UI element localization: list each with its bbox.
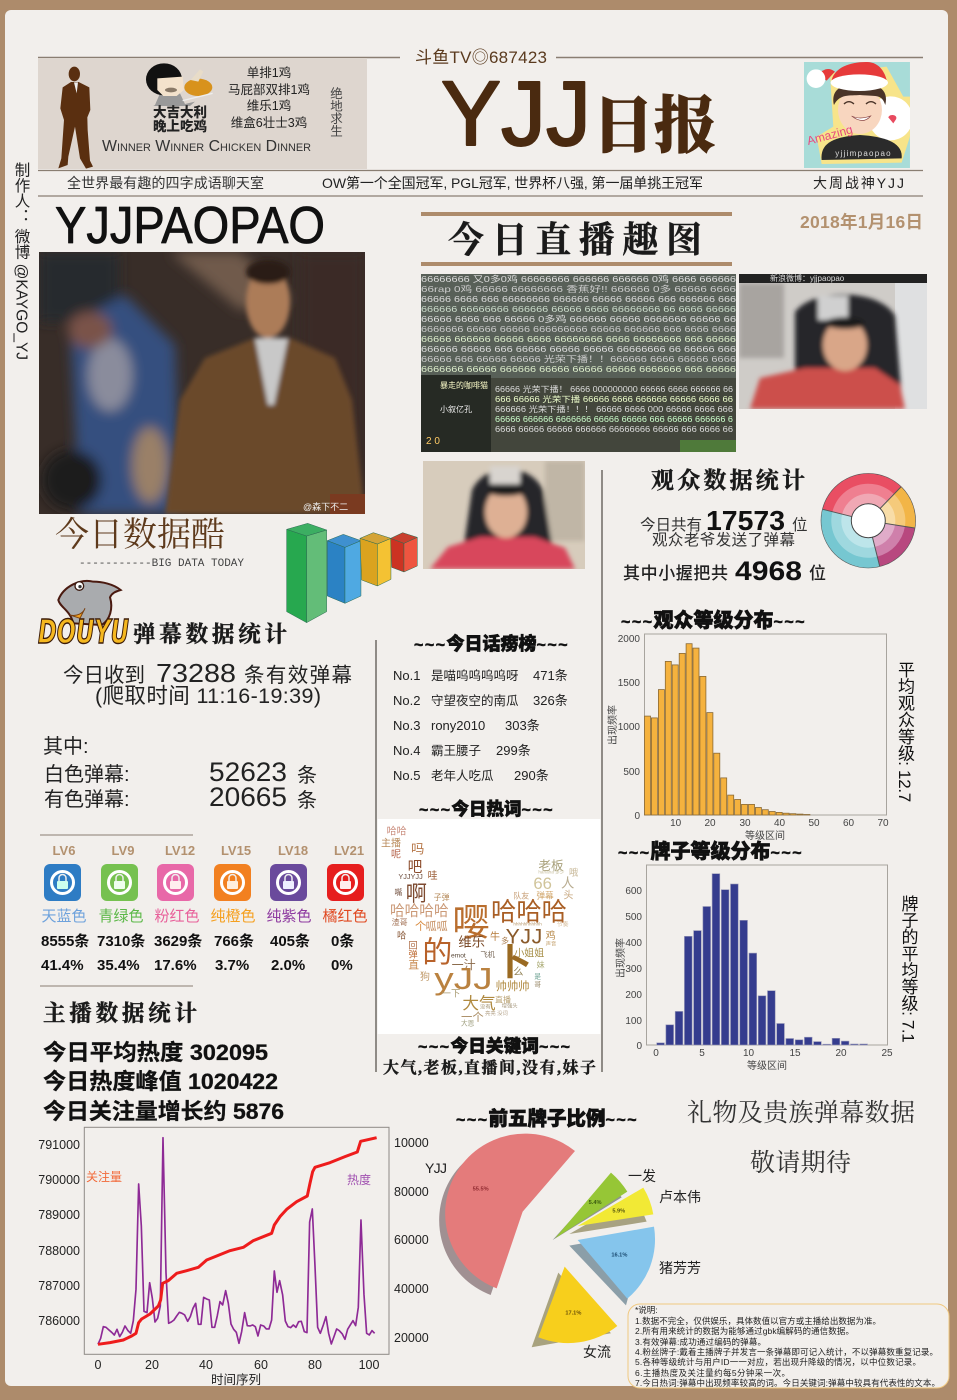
colour names: 粉红色 [154,908,200,925]
colour names: 天蓝色 [41,908,87,925]
text block: white vs colored danmaku: 有色弹幕: [44,788,130,811]
line chart: followers and heat: 786000 [38,1314,80,1328]
gifts placeholder: 礼物及贵族弹幕数据 [687,1099,915,1127]
photo: streamer smiling in chair [423,461,585,569]
tagline: chat room: 全世界最有趣的四字成语聊天室 [67,175,264,191]
bar chart: viewer level: 40 [774,818,785,829]
photo: chat screenshot: 小叙亿孔 [440,404,472,414]
bar chart: viewer level: 2000 [618,634,640,645]
word cloud: YJJYJJ [398,872,423,881]
title: YJJ日报 [441,63,716,165]
word cloud: YJJ [506,924,542,948]
text block: streamer stats: 今日平均热度 302095 [43,1040,268,1065]
word cloud: 增强头 [502,1002,518,1010]
word cloud: 是 [534,972,541,980]
line chart: followers and heat: 40000 [394,1282,429,1296]
panel: audience stats: 位 [792,516,808,534]
photo: chat screenshot [421,274,736,452]
notes box: 6.主播热度及关注量约每5分钟采一次。 [635,1368,790,1378]
list: top talkers: No.1 [393,668,420,683]
total viewers: 今日共有 [640,516,702,534]
bar chart: badge level: 10 [743,1048,754,1059]
icon: meme face with roast chicken [146,63,213,106]
word cloud: hahaha 多少 [538,868,565,875]
heading: 观众数据统计 [651,468,805,493]
list: top talkers: 霸王腰子 [431,744,481,758]
percentages: 41.4% [41,957,84,974]
win list: 维盒6壮士3鸡 [231,115,307,130]
panel: audience stats: 位 [809,563,826,583]
icon: man silhouette [58,67,93,169]
heading: today's keywords: ~~~今日关键词~~~ [418,1035,572,1056]
bar chart: badge level: 600 [625,886,642,897]
bar chart: badge level: 0 [653,1048,659,1059]
pie chart: top five badges: 16.1% [611,1253,627,1259]
photo: streamer in gaming chair, with weibo strip: 新浪微博：yjjpaopao [770,273,845,283]
word cloud: 嘴 [394,887,402,897]
heading: big data today: 今日数据酷 [55,516,225,554]
heading: viewer level distribution: ~~~观众等级分布~~~ [621,608,806,632]
keywords: 大气,老板,直播间,没有,妹子 [383,1058,596,1077]
bar chart: viewer level: 1500 [618,678,640,689]
bar chart: viewer level: 0 [634,811,640,822]
line chart: followers and heat: 10000 [394,1136,429,1150]
bar chart: viewer level: 10 [670,818,682,829]
photo: chat screenshot: 6666666 66666 666666 66666 66666 66666 6666666 666 66666 [421,364,736,374]
heat line [98,1138,375,1344]
pie chart: top five badges: 卢本伟 [659,1189,701,1205]
photo: chat screenshot: 666666 光荣下播！！！ 66666 6666 000 66666 6666 666 [495,404,734,414]
percentages: 17.6% [154,957,197,974]
sentence: 观众老爷发送了弹幕 [652,531,795,549]
word cloud: 亮亮 没词 [485,1009,508,1017]
photo: chat screenshot: 66666 6666 666 66666666 666666 66666 66666 666 666666 666 [421,294,736,304]
bar chart: viewer level: 50 [808,818,820,829]
text block: streamer stats: 今日热度峰值 1020422 [43,1069,278,1094]
text block: total danmaku: (爬取时间 11:16-19:39) [95,684,321,708]
notes box: 2.所有用来统计的数据为能够通过gbk编解码的通信数据。 [635,1326,854,1336]
text block: white vs colored danmaku: 条 [297,789,317,812]
word cloud: 子弹 [434,892,450,902]
text block: white vs colored danmaku: 条 [297,764,317,787]
line chart: followers and heat: 20 [145,1358,159,1372]
line chart: followers and heat: 788000 [38,1244,80,1258]
pie chart: top five badges: 一发 [628,1168,656,1184]
list: top talkers: rony2010 [431,718,485,733]
pie chart: top five badges: 5.9% [612,1209,625,1215]
heading: top five badges: ~~~前五牌子比例~~~ [456,1107,638,1130]
notes box [628,1304,949,1388]
gifts placeholder [687,1099,915,1177]
list: top talkers: 326条 [533,693,568,708]
counts [41,933,354,950]
icon: blue lock [44,864,81,901]
word cloud: 回 [408,940,418,950]
percentages: 3.7% [215,957,249,974]
word cloud: 牛 [490,930,500,943]
word cloud: 头 [563,889,573,901]
level labels [53,843,364,858]
panel: audience stats: 4968 [735,556,802,586]
icon: red lock [327,864,364,901]
win list: 维乐1鸡 [247,98,291,113]
bar chart: badge level: 5 [699,1048,705,1059]
icon: green lock [101,864,138,901]
pie chart: top five badges: 55.5% [473,1187,489,1193]
line chart: followers and heat: 20000 [394,1331,429,1345]
word cloud: 嘤 [452,902,490,944]
word cloud: 帅帅帅 [496,980,530,993]
heading: streamer stats: 主播数据统计 [43,1001,197,1026]
heading: danmaku stats: 弹幕数据统计 [133,622,287,647]
word cloud: 呢 [391,849,401,861]
doughnut chart [821,473,916,568]
word cloud: 弹幕 [536,889,554,900]
bar chart: badge level: 15 [789,1048,801,1059]
photo: streamer in suit [39,252,365,514]
heading: today's fun screenshots [421,212,732,266]
icon: cartoon avatar: yjjimpaopao [835,149,891,158]
icon: Douyu shark logo: DOUYU [38,612,129,651]
icon: 3D bar chart [287,523,417,623]
icon: cartoon avatar: Amazing [805,122,854,148]
heading: today's fun screenshots: 今日直播趣图 [448,220,702,260]
word cloud: yJJ [434,962,493,996]
line chart: followers and heat: 80 [308,1358,322,1372]
list: top talkers: No.3 [393,718,420,733]
bar chart: badge level: 出现频率 [614,938,627,978]
date: 2018年1月16日 [800,212,923,232]
word cloud: hhhhhhhhhhh [513,922,542,927]
list: top talkers: 303条 [505,718,540,733]
photo: chat screenshot: 6666 66666 66666 666666 66666666 66666 666 6666 66 [495,425,734,434]
colour names [41,908,368,925]
streamer name: YJJPAOPAO [55,197,325,255]
line chart: followers and heat: 60000 [394,1233,429,1247]
word cloud: 哦 [569,867,579,878]
english slogan: Winner Winner Chicken Dinner [102,138,311,155]
percentages: 35.4% [97,957,140,974]
bar chart: viewer level: 1000 [618,722,640,733]
word cloud: 哈哈哈哈 [390,903,449,920]
list: top talkers: No.4 [393,743,420,758]
word cloud: emot [451,953,466,960]
level labels: LV21 [334,843,364,858]
notes box: 1.数据不完全，仅供娱乐，具体数值以官方或主播给出数据为准。 [635,1316,881,1326]
heading: hot words: ~~~今日热词~~~ [419,799,554,819]
text block: total danmaku [63,660,352,708]
word cloud: 主播 [381,837,401,850]
text block: streamer stats: 今日关注量增长约 5876 [43,1099,284,1124]
colour names: 青绿色 [98,908,144,925]
list: top talkers: 299条 [496,743,531,758]
heading: top talkers: ~~~今日话痨榜~~~ [414,633,569,654]
line chart: followers and heat: 0 [95,1358,102,1372]
photo: chat screenshot: 66666 666666 6666666 66666 66666 666 66666 666666 6 [495,415,734,424]
word cloud: 声音 [546,940,557,948]
word cloud: 直播 [495,994,511,1004]
pie chart: top five badges [425,1134,701,1360]
text block: total danmaku: 今日收到 [63,664,145,687]
word cloud: 队友 [513,890,529,900]
word cloud: 鸡 [546,929,556,942]
bar chart: viewer level [606,634,889,842]
icon: Douyu shark logo [38,581,129,651]
panel: audience stats: 17573 [706,505,785,536]
gifts placeholder: 敬请期待 [750,1149,851,1177]
word cloud: 一汁 [452,958,476,972]
heading: big data today: -----------BIG DATA TODAY [79,558,244,570]
word cloud [378,819,600,1034]
word cloud: 渣哥 [392,917,408,927]
photo: chat screenshot: 666 66666 光荣下播 66666 6666 666666 66666 6666 66 [495,394,734,404]
average badge level: 牌子的平均等级: 7.1 [898,895,918,1042]
vertical credit: 制作人： 微博 @KAYGO_YJ [12,162,30,360]
list: top talkers [393,668,568,783]
photo: streamer in suit: @森下不二 [303,501,348,512]
word cloud: 啊 [406,882,427,906]
word cloud: 哇 [428,869,438,882]
word cloud: 老板 [538,859,564,873]
channel number: 斗鱼TV◎687423 [415,48,547,67]
bar chart: viewer level: 等级区间 [745,829,785,842]
word cloud: 一个 [461,1011,484,1024]
line chart: followers and heat: 时间序列 [211,1372,261,1387]
bar chart: badge level: 500 [625,912,642,923]
line chart: followers and heat: 787000 [38,1279,80,1293]
colour names: 纯紫色 [266,908,312,925]
text block: white vs colored danmaku: 白色弹幕: [44,763,130,786]
photo: chat screenshot: 66666666 又0多0鸡 66666666 666666 666666 0鸡 6666 666666 [421,274,736,284]
line chart: followers and heat: 关注量 [86,1169,122,1184]
word cloud: 狗 [420,970,430,983]
photo: chat screenshot: 666666 66666 666 66666 66666 66666 66666666 66 66666 666 [421,344,736,354]
bar chart: viewer level: 20 [704,818,716,829]
photo: streamer in gaming chair, with weibo strip [739,273,927,409]
icon: orange lock [214,864,251,901]
bar chart: badge level: 20 [835,1048,847,1059]
line chart: followers and heat: 791000 [38,1138,80,1152]
panel: winner winner chicken dinner [38,58,367,169]
word cloud: 人 [561,876,574,891]
text block: total danmaku: 73288 [156,660,236,688]
level labels: LV12 [165,843,195,858]
photo: chat screenshot: 暴走的咖啡猫 [440,380,488,390]
list: top talkers: 290条 [514,768,549,783]
photo: chat screenshot: 66rap 0鸡 66666 66666666 香蕉好!! 666666 0多 66666 6666 [421,284,736,294]
line chart: followers and heat: 100 [359,1358,379,1372]
line chart: followers and heat: 热度 [347,1172,371,1187]
list: top talkers: No.2 [393,693,420,708]
photo: chat screenshot: 66666 6666 666 66666 0多鸡 666666 66666 6666666 66666 66 [421,314,736,324]
word cloud: 么 [513,966,523,978]
icon: purple lock [270,864,307,901]
bar chart: viewer level: 出现频率 [606,705,619,745]
text block: streamer stats [43,1040,284,1124]
word cloud: 大气 [462,994,496,1013]
tagline: nickname: 大周战神YJJ [813,175,904,191]
bar chart: badge level: 等级区间 [747,1059,787,1072]
counts: 0条 [331,933,354,950]
list: top talkers: 老年人吃瓜 [431,769,494,783]
win list [228,65,310,130]
heading: badge level distribution: ~~~牌子等级分布~~~ [618,839,803,863]
list: top talkers: 471条 [533,668,568,683]
level labels: LV18 [278,843,308,858]
text block: total danmaku: 条有效弹幕 [244,664,352,687]
word cloud: 吧 [408,860,423,876]
word cloud: 维乐 [458,935,485,950]
text block: white vs colored danmaku: 其中: [43,735,89,758]
panel: danmaku colour levels [41,843,368,974]
bar chart: badge level: 400 [625,938,642,949]
word cloud: 大恩 [461,1019,475,1028]
text block: white vs colored danmaku: 52623 [209,757,287,787]
photo: chat screenshot: 2 0 [426,436,440,447]
word cloud: 多 [501,935,509,945]
line chart: followers and heat: 790000 [38,1173,80,1187]
line chart: followers and heat [38,1127,429,1387]
photo: chat screenshot: 66666 666 66666 66666 光荣下播！！666666 6666 66666 6666 [421,354,736,364]
bar chart: badge level: 0 [636,1041,642,1052]
pie chart: top five badges: 5.4% [589,1200,602,1206]
line chart: followers and heat: 80000 [394,1185,429,1199]
photo: chat screenshot: 66666 光荣下播！ 6666 000000000 66666 6666 666666 66 [495,384,734,394]
title: YJJ日报: 日报 [592,93,716,161]
percentages [41,957,353,974]
win list: 马屁部双排1鸡 [228,82,310,97]
bar chart: viewer level: 500 [623,767,640,778]
notes box: 4.粉丝牌子:戴着主播牌子并发言一条弹幕即可记入统计，不以弹幕数重复记录。 [635,1347,938,1357]
average viewer level: 平均观众等级: 12.7 [895,661,914,802]
word cloud: 弹 [408,949,418,960]
meme caption: 大吉大利 [153,104,207,120]
counts: 405条 [270,933,310,950]
notes box: 3.有效弹幕:成功通过编码的弹幕。 [635,1337,766,1347]
panel: audience stats [623,468,916,586]
word cloud: 卜 [495,942,532,983]
bar chart: badge level: 300 [625,964,642,975]
percentages: 2.0% [271,957,305,974]
text block: white vs colored danmaku [43,735,317,812]
counts: 3629条 [154,933,202,950]
list: top talkers: No.5 [393,768,420,783]
percentages: 0% [331,957,353,974]
line chart: followers and heat: 60 [254,1358,268,1372]
counts: 766条 [214,933,254,950]
heading: big data today [55,516,244,570]
word cloud: 一下 [442,989,460,999]
word cloud: 哥 [534,981,541,989]
colour names: 纯橙色 [210,908,256,925]
list: top talkers: 守望夜空的南瓜 [431,693,519,708]
colour names: 橘红色 [322,908,368,925]
pie chart: top five badges: 猪芳芳 [659,1260,701,1276]
title: YJJ日报: YJJ [441,63,591,165]
icon: cartoon avatar [804,62,913,168]
word cloud: 直 [408,958,419,971]
bar chart: badge level: 200 [625,990,642,1001]
list: top talkers: 是喵呜呜呜呜呀 [431,668,519,683]
win list: 单排1鸡 [247,65,291,80]
bar chart: viewer level: 60 [843,818,854,829]
pie chart: top five badges: 女流 [583,1344,611,1360]
word cloud: 没有 [480,1002,491,1010]
word cloud: 哈哈 [387,824,407,837]
word cloud: 小姐姐 [514,947,544,960]
word cloud: 节奏 [557,921,569,929]
bar chart: viewer level: 30 [739,818,751,829]
word cloud: 个 [415,920,426,933]
word cloud: 呱呱 [426,920,448,933]
photo: chat screenshot: 666666 66666666 666666 66666 6666 66666666 66 6666 66666 [421,304,736,314]
meme caption: 晚上吃鸡 [153,118,207,134]
photo: chat screenshot: 66666 666666 66666 6666 66666666 6666 66666666 666 66666 [421,334,736,344]
level labels: LV6 [53,843,75,858]
level labels: LV9 [112,843,134,858]
line chart: followers and heat: 789000 [38,1208,80,1222]
bar chart: badge level [614,865,893,1072]
meme caption [153,104,207,134]
level labels: LV15 [221,843,251,858]
word cloud: 哈哈哈 [491,898,567,926]
text block: white vs colored danmaku: 20665 [209,782,287,812]
vertical game name: 绝地求生 [328,86,342,137]
word cloud: 吗 [411,841,424,856]
followers line [98,1138,377,1344]
fans total: 其中小握把共 [623,564,728,583]
pie chart: top five badges: YJJ [425,1160,447,1176]
bar chart: badge level: 100 [625,1016,642,1027]
notes box: 7.今日热词:弹幕中出现频率较高的词。今日关键词:弹幕中较具有代表性的文本。 [635,1378,940,1388]
counts: 8555条 [41,933,89,950]
notes box: *说明: [635,1305,658,1315]
word cloud: 哈 [397,929,406,940]
tagline: honours: OW第一个全国冠军, PGL冠军, 世界杯八强, 第一届单挑王冠军 [322,175,703,191]
counts: 7310条 [97,933,145,950]
line chart: followers and heat: 40 [199,1358,213,1372]
word cloud: 妹 [537,960,545,970]
bar chart: badge level: 25 [881,1048,893,1059]
notes box: 5.各种等级统计与用户ID一一对应，若出现升降级的情况，以中位数记录。 [635,1357,921,1367]
bar chart: viewer level: 70 [877,818,889,829]
pie chart: top five badges: 17.1% [565,1311,581,1317]
photo: chat screenshot: 6666666 66666 66666 666666666 66666 666666 666 6666 6666 [421,324,736,334]
word cloud: 的 [422,936,452,969]
icon: pink lock [157,864,194,901]
word cloud: 66 [533,874,552,893]
word cloud: 飞机 [480,950,496,959]
